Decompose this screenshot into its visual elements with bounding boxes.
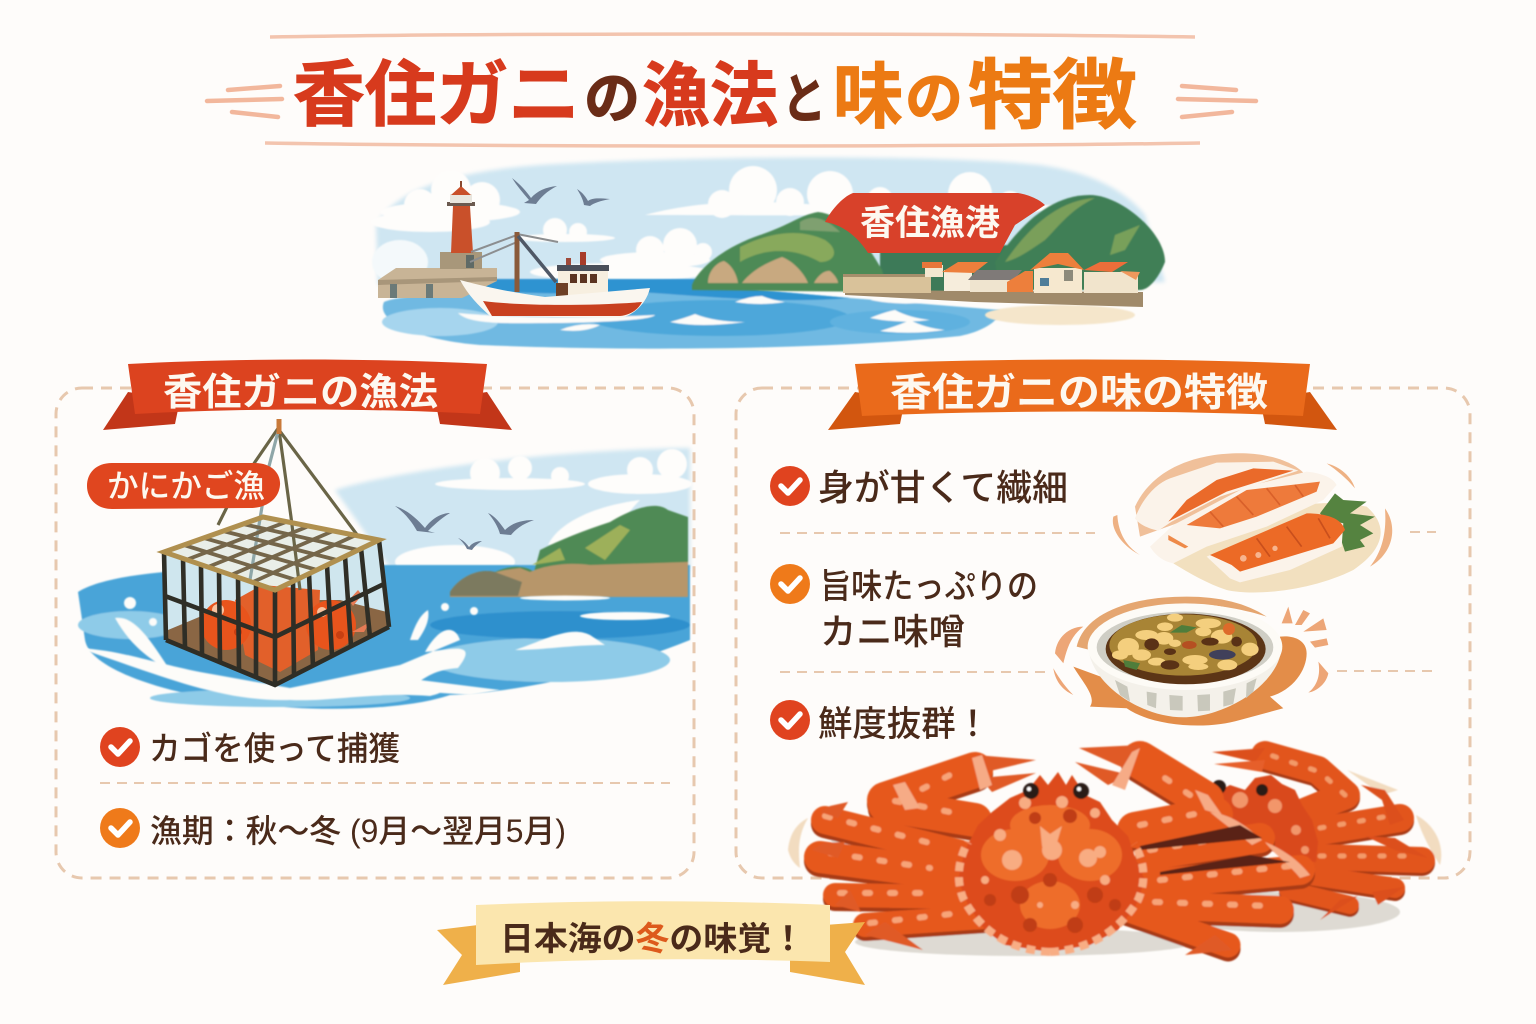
item: freshness: 鮮度抜群！: [818, 705, 990, 744]
title: 漁法: [642, 57, 778, 135]
panel: fishing method: [56, 388, 694, 878]
title: の: [584, 67, 640, 130]
title: [207, 34, 1256, 146]
ribbon: winter delicacy: 日本海の冬の味覚！: [500, 920, 805, 957]
item: crab miso: [770, 564, 1038, 652]
harbor name tag: [825, 193, 1045, 253]
shell mottling: [981, 805, 1122, 929]
crab: rear: [1208, 748, 1428, 920]
houses: [843, 253, 1140, 293]
title: の: [905, 67, 963, 130]
hills: [692, 195, 1165, 295]
label: crab pot fishing: かにかご漁: [107, 468, 265, 504]
top grid: [184, 522, 358, 582]
leaves: [1320, 493, 1375, 552]
ribbon: winter delicacy: [437, 901, 865, 985]
ribbon: taste features: [828, 360, 1337, 430]
fishing boat: [460, 232, 650, 318]
cage interior: [164, 517, 389, 685]
roll 3: [1207, 513, 1343, 582]
clouds: [395, 449, 692, 579]
water: [382, 279, 1000, 349]
hook: [276, 419, 282, 434]
cage frame: [164, 540, 389, 685]
shadows: [830, 824, 1400, 956]
ribbon: taste features: 香住ガニの味の特徴: [890, 372, 1268, 415]
item: sweet meat: 身が甘くて繊細: [818, 467, 1068, 508]
illustration: crab miso bowl: [1053, 597, 1328, 726]
seawall: [845, 290, 1143, 307]
title: と: [782, 70, 826, 130]
item: freshness: [770, 700, 990, 744]
pale claw joints: [893, 748, 1310, 878]
clouds: [370, 166, 1085, 284]
title: 香住ガニ: [293, 56, 580, 136]
water: [78, 565, 690, 709]
scene: crab pot at sea: [78, 448, 692, 709]
title: 特徴: [968, 54, 1137, 139]
illustration: snow crabs: [788, 745, 1441, 956]
lighthouse and pier: [378, 181, 497, 298]
island: [450, 506, 688, 597]
crab pot: [164, 419, 389, 685]
crab: front shell: [958, 772, 1145, 952]
ropes: [218, 427, 358, 590]
birds: [512, 178, 610, 206]
title: 味: [833, 58, 903, 138]
sky: [335, 448, 690, 570]
harbor name tag: 香住漁港: [860, 204, 1000, 243]
sky: [376, 158, 1165, 285]
panel: taste features: [736, 388, 1470, 878]
sand: [985, 305, 1135, 325]
item: crab miso: 旨味たっぷりの: [820, 568, 1038, 606]
foam: [78, 596, 670, 700]
harbor illustration: [370, 158, 1165, 349]
crabs in cage: [201, 585, 370, 672]
crab: front legs: [812, 745, 1310, 955]
ribbon: fishing method: [103, 360, 512, 430]
roll 1: [1135, 462, 1298, 531]
item: crab miso: カニ味噌: [820, 611, 965, 652]
label: crab pot fishing: [87, 463, 280, 509]
ribbon: fishing method: 香住ガニの漁法: [163, 372, 438, 414]
item: pots: カゴを使って捕獲: [149, 730, 400, 767]
roll 2: [1150, 472, 1337, 563]
item: season: 漁期：秋〜冬 (9月〜翌月5月): [150, 813, 566, 849]
birds: [395, 506, 534, 550]
illustration: crab meat plate: [1113, 453, 1392, 592]
